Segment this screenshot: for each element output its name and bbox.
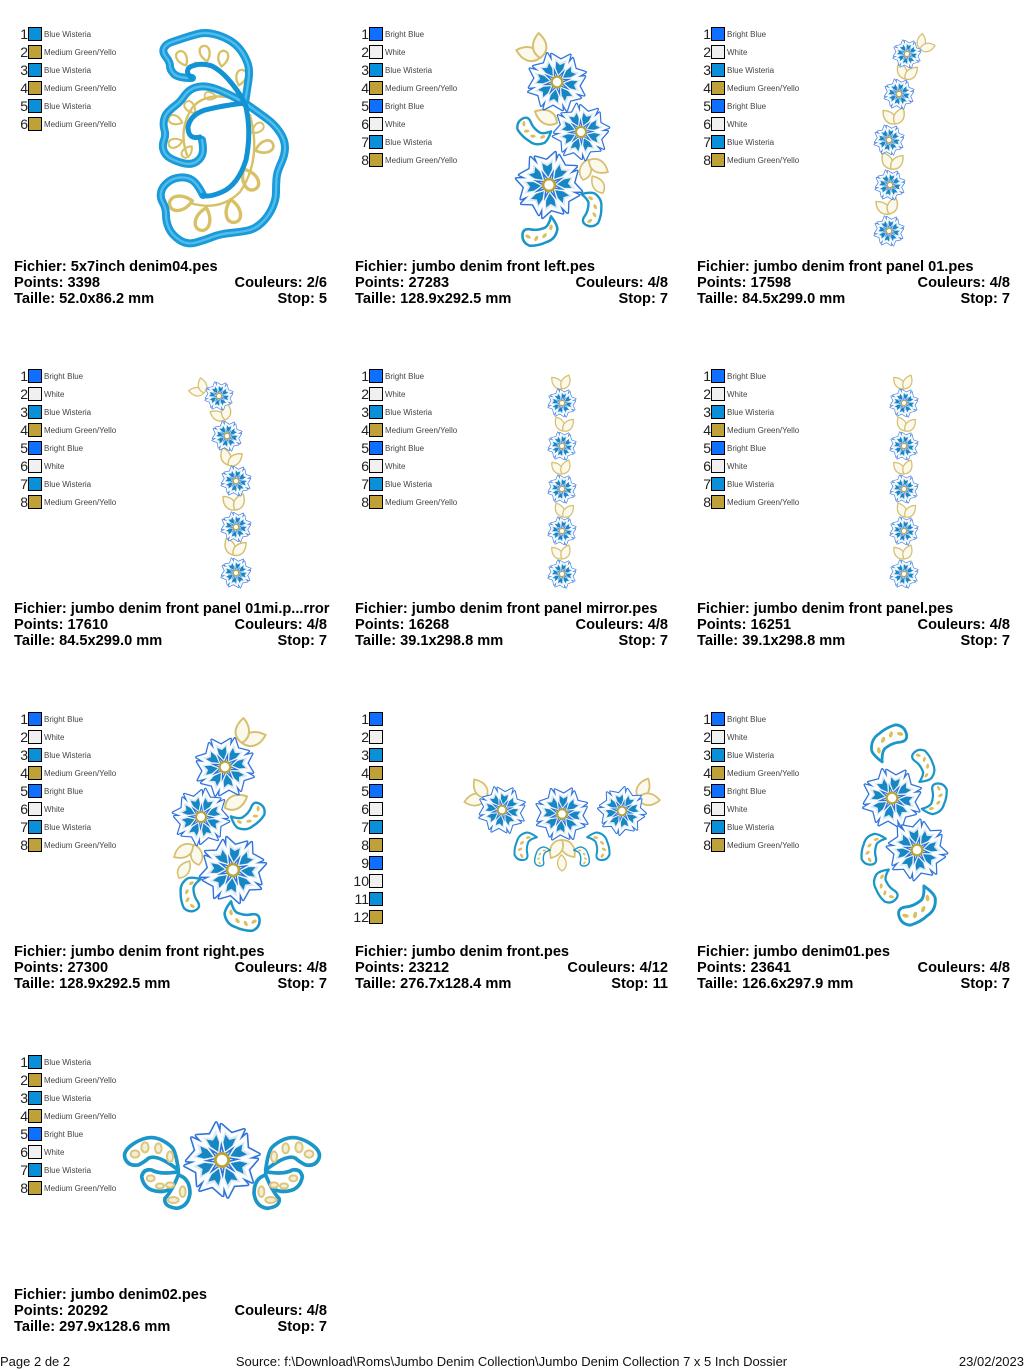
- colour legend: 6: [20, 116, 28, 132]
- colour legend: 8: [20, 1180, 28, 1196]
- file details: [14, 601, 330, 649]
- colour legend: White: [727, 120, 747, 129]
- colour legend: 1: [703, 368, 711, 384]
- colour legend: [703, 711, 799, 853]
- colour legend: Bright Blue: [44, 444, 83, 453]
- colour legend: 3: [703, 62, 711, 78]
- file details: Taille: 39.1x298.8 mm: [697, 633, 845, 649]
- colour legend: 5: [20, 783, 28, 799]
- panel: jumbo denim front panel mirror: [355, 368, 668, 649]
- colour legend: 4: [703, 422, 711, 438]
- colour legend: [361, 368, 457, 510]
- file details: Points: 27300: [14, 960, 108, 976]
- colour legend: 8: [703, 494, 711, 510]
- colour legend: 8: [361, 494, 369, 510]
- colour legend: 5: [20, 98, 28, 114]
- colour legend: 5: [703, 98, 711, 114]
- file details: Couleurs: 4/8: [918, 617, 1010, 633]
- file details: Taille: 276.7x128.4 mm: [355, 976, 511, 992]
- file details: Couleurs: 4/12: [567, 960, 668, 976]
- colour legend: 2: [703, 44, 711, 60]
- colour legend: Bright Blue: [727, 30, 766, 39]
- colour legend: 5: [20, 1126, 28, 1142]
- file details: Points: 23641: [697, 960, 791, 976]
- footer: date: 23/02/2023: [959, 1354, 1024, 1369]
- colour legend: 4: [361, 80, 369, 96]
- colour legend: 6: [20, 1144, 28, 1160]
- colour legend: Blue Wisteria: [727, 66, 774, 75]
- colour legend: Bright Blue: [727, 102, 766, 111]
- colour legend: 8: [20, 837, 28, 853]
- colour legend: Blue Wisteria: [385, 138, 432, 147]
- file details: Fichier: jumbo denim front panel 01.pes: [697, 259, 974, 275]
- colour legend: 7: [703, 134, 711, 150]
- file details: Points: 17598: [697, 275, 791, 291]
- file details: Couleurs: 4/8: [918, 275, 1010, 291]
- file details: Points: 3398: [14, 275, 100, 291]
- colour legend: 1: [361, 26, 369, 42]
- file details: Fichier: jumbo denim front right.pes: [14, 944, 265, 960]
- colour legend: White: [727, 48, 747, 57]
- colour legend: 2: [703, 386, 711, 402]
- colour legend numbers only: [353, 711, 383, 925]
- embroidery: straight floral column: [548, 374, 576, 588]
- file details: Stop: 7: [278, 976, 327, 992]
- colour legend: Blue Wisteria: [44, 30, 91, 39]
- colour legend: 5: [703, 783, 711, 799]
- colour legend: White: [727, 805, 747, 814]
- embroidery: curved floral column mirrored: [188, 377, 252, 588]
- colour legend: 3: [20, 62, 28, 78]
- file details: [14, 259, 327, 307]
- file details: Fichier: jumbo denim front panel.pes: [697, 601, 953, 617]
- panel: jumbo denim front panel: [697, 368, 1010, 649]
- colour legend: [703, 368, 799, 510]
- file details: Points: 20292: [14, 1303, 108, 1319]
- file details: Fichier: jumbo denim front left.pes: [355, 259, 595, 275]
- colour legend: 8: [361, 152, 369, 168]
- colour legend numbers only: 7: [361, 819, 369, 835]
- colour legend: 5: [361, 98, 369, 114]
- colour legend: Bright Blue: [727, 444, 766, 453]
- colour legend: [361, 26, 457, 168]
- colour legend: 8: [20, 494, 28, 510]
- colour legend numbers only: 6: [361, 801, 369, 817]
- colour legend numbers only: 9: [361, 855, 369, 871]
- file details: Stop: 11: [611, 976, 668, 992]
- colour legend: 7: [703, 819, 711, 835]
- colour legend: Blue Wisteria: [385, 408, 432, 417]
- colour legend: Blue Wisteria: [44, 751, 91, 760]
- file details: [697, 944, 1010, 992]
- colour legend numbers only: 8: [361, 837, 369, 853]
- file details: Stop: 7: [619, 291, 668, 307]
- file details: [697, 601, 1010, 649]
- colour legend: Blue Wisteria: [385, 66, 432, 75]
- file details: Fichier: jumbo denim front.pes: [355, 944, 569, 960]
- colour legend: 7: [361, 134, 369, 150]
- colour legend: 1: [703, 26, 711, 42]
- colour legend: Blue Wisteria: [44, 480, 91, 489]
- embroidery: flower with paisley fans: [122, 1121, 322, 1210]
- file details: Couleurs: 4/8: [235, 617, 327, 633]
- colour legend: Bright Blue: [44, 1130, 83, 1139]
- colour legend numbers only: 3: [361, 747, 369, 763]
- file details: Fichier: 5x7inch denim04.pes: [14, 259, 218, 275]
- embroidery: floral spray left: [514, 32, 610, 248]
- colour legend: 4: [361, 422, 369, 438]
- colour legend: Blue Wisteria: [44, 408, 91, 417]
- colour legend: 3: [703, 747, 711, 763]
- colour legend: Bright Blue: [727, 715, 766, 724]
- colour legend: Blue Wisteria: [727, 480, 774, 489]
- colour legend: [20, 368, 116, 510]
- file details: Fichier: jumbo denim01.pes: [697, 944, 890, 960]
- panel: jumbo denim front right: [14, 711, 327, 992]
- colour legend: White: [727, 462, 747, 471]
- file details: Fichier: jumbo denim02.pes: [14, 1287, 207, 1303]
- colour legend: 2: [20, 1072, 28, 1088]
- colour legend numbers only: 5: [361, 783, 369, 799]
- panel: jumbo denim front left: [355, 26, 668, 307]
- colour legend: 3: [361, 404, 369, 420]
- colour legend: 7: [703, 476, 711, 492]
- colour legend: 3: [361, 62, 369, 78]
- panel: jumbo denim front panel 01 mirror: [14, 368, 330, 649]
- colour legend: Bright Blue: [727, 372, 766, 381]
- file details: Stop: 7: [619, 633, 668, 649]
- colour legend: 1: [20, 711, 28, 727]
- footer: source path: Source: f:\Download\Roms\Jumbo Denim Collection\Jumbo Denim Collection 7 x 5 Inch Dossier: [236, 1354, 787, 1369]
- colour legend: 7: [20, 1162, 28, 1178]
- colour legend: White: [44, 805, 64, 814]
- colour legend numbers only: 4: [361, 765, 369, 781]
- colour legend: 6: [703, 801, 711, 817]
- colour legend: 3: [703, 404, 711, 420]
- colour legend: 1: [703, 711, 711, 727]
- colour legend: Bright Blue: [44, 787, 83, 796]
- colour legend: White: [385, 120, 405, 129]
- panel: jumbo denim front panel 01: [697, 26, 1010, 307]
- file details: Points: 16251: [697, 617, 791, 633]
- file details: [14, 1287, 327, 1335]
- colour legend: Blue Wisteria: [727, 408, 774, 417]
- colour legend: White: [44, 462, 64, 471]
- file details: Points: 16268: [355, 617, 449, 633]
- file details: Taille: 126.6x297.9 mm: [697, 976, 853, 992]
- file details: Taille: 84.5x299.0 mm: [697, 291, 845, 307]
- colour legend: 2: [20, 386, 28, 402]
- file details: [355, 259, 668, 307]
- colour legend: Blue Wisteria: [44, 1166, 91, 1175]
- colour legend: Blue Wisteria: [44, 823, 91, 832]
- colour legend numbers only: 1: [361, 711, 369, 727]
- file details: Taille: 39.1x298.8 mm: [355, 633, 503, 649]
- colour legend: 7: [20, 819, 28, 835]
- colour legend: 2: [361, 44, 369, 60]
- colour legend: Blue Wisteria: [727, 823, 774, 832]
- file details: [355, 944, 668, 992]
- colour legend: Bright Blue: [385, 372, 424, 381]
- colour legend: Bright Blue: [727, 787, 766, 796]
- colour legend: White: [44, 733, 64, 742]
- colour legend: [20, 711, 116, 853]
- colour legend: 5: [20, 440, 28, 456]
- colour legend: 6: [703, 116, 711, 132]
- colour legend: Blue Wisteria: [727, 751, 774, 760]
- colour legend: 2: [361, 386, 369, 402]
- file details: Taille: 84.5x299.0 mm: [14, 633, 162, 649]
- colour legend: Blue Wisteria: [44, 102, 91, 111]
- colour legend: Blue Wisteria: [44, 1058, 91, 1067]
- file details: Points: 23212: [355, 960, 449, 976]
- file details: Couleurs: 4/8: [918, 960, 1010, 976]
- colour legend: 7: [361, 476, 369, 492]
- footer: page number: Page 2 de 2: [0, 1354, 70, 1369]
- panel: 5x7inch denim04: [14, 26, 327, 307]
- colour legend: Bright Blue: [44, 715, 83, 724]
- colour legend: Blue Wisteria: [44, 66, 91, 75]
- file details: Couleurs: 4/8: [235, 1303, 327, 1319]
- colour legend: Bright Blue: [385, 444, 424, 453]
- embroidery: curved floral column: [874, 33, 936, 246]
- colour legend: 1: [20, 26, 28, 42]
- colour legend: White: [727, 390, 747, 399]
- file details: Points: 17610: [14, 617, 108, 633]
- colour legend: White: [385, 48, 405, 57]
- colour legend: 8: [703, 837, 711, 853]
- colour legend: 3: [20, 747, 28, 763]
- file details: [697, 259, 1010, 307]
- file details: Stop: 7: [961, 976, 1010, 992]
- colour legend: White: [385, 462, 405, 471]
- file details: Fichier: jumbo denim front panel mirror.pes: [355, 601, 657, 617]
- colour legend: White: [44, 1148, 64, 1157]
- colour legend: 5: [361, 440, 369, 456]
- file details: Stop: 5: [278, 291, 327, 307]
- file details: [14, 944, 327, 992]
- file details: Taille: 297.9x128.6 mm: [14, 1319, 170, 1335]
- colour legend: 4: [20, 1108, 28, 1124]
- colour legend: 4: [20, 422, 28, 438]
- colour legend: 5: [703, 440, 711, 456]
- file details: Taille: 128.9x292.5 mm: [14, 976, 170, 992]
- colour legend: 2: [703, 729, 711, 745]
- file details: Stop: 7: [278, 633, 327, 649]
- file details: Couleurs: 4/8: [235, 960, 327, 976]
- colour legend: Bright Blue: [385, 102, 424, 111]
- colour legend: 4: [703, 765, 711, 781]
- embroidery: paisley: [156, 29, 289, 248]
- colour legend: 7: [20, 476, 28, 492]
- colour legend: Blue Wisteria: [44, 1094, 91, 1103]
- colour legend: [703, 26, 799, 168]
- colour legend: 4: [20, 80, 28, 96]
- colour legend: White: [385, 390, 405, 399]
- colour legend: White: [727, 733, 747, 742]
- file details: Points: 27283: [355, 275, 449, 291]
- colour legend: 2: [20, 44, 28, 60]
- colour legend: 2: [20, 729, 28, 745]
- colour legend: 6: [361, 458, 369, 474]
- colour legend: 3: [20, 1090, 28, 1106]
- file details: Couleurs: 4/8: [576, 275, 668, 291]
- colour legend: 6: [361, 116, 369, 132]
- colour legend: 6: [20, 801, 28, 817]
- colour legend: 6: [703, 458, 711, 474]
- panel: jumbo denim02: [14, 1054, 327, 1335]
- panel: jumbo denim front: [353, 711, 668, 992]
- file details: Stop: 7: [278, 1319, 327, 1335]
- colour legend: Bright Blue: [44, 372, 83, 381]
- colour legend: 6: [20, 458, 28, 474]
- colour legend: 3: [20, 404, 28, 420]
- colour legend: 1: [20, 368, 28, 384]
- file details: Stop: 7: [961, 291, 1010, 307]
- colour legend numbers only: 2: [361, 729, 369, 745]
- colour legend: [20, 1054, 116, 1196]
- colour legend: 1: [361, 368, 369, 384]
- colour legend: 1: [20, 1054, 28, 1070]
- colour legend: Blue Wisteria: [727, 138, 774, 147]
- colour legend: 4: [20, 765, 28, 781]
- file details: [355, 601, 668, 649]
- colour legend numbers only: 10: [353, 873, 369, 889]
- file details: Stop: 7: [961, 633, 1010, 649]
- embroidery: neckline floral arrangement: [464, 778, 661, 872]
- colour legend numbers only: 12: [353, 909, 369, 925]
- panel: jumbo denim01: [697, 711, 1010, 992]
- colour legend numbers only: 11: [354, 891, 369, 907]
- colour legend: 4: [703, 80, 711, 96]
- colour legend: [20, 26, 116, 132]
- embroidery: two flowers with curls: [860, 723, 948, 927]
- embroidery: floral spray right: [172, 717, 268, 932]
- colour legend: Bright Blue: [385, 30, 424, 39]
- file details: Couleurs: 2/6: [235, 275, 327, 291]
- colour legend: White: [44, 390, 64, 399]
- file details: Taille: 128.9x292.5 mm: [355, 291, 511, 307]
- file details: Taille: 52.0x86.2 mm: [14, 291, 154, 307]
- colour legend: 8: [703, 152, 711, 168]
- colour legend: Blue Wisteria: [385, 480, 432, 489]
- embroidery: straight floral column: [890, 374, 918, 588]
- file details: Couleurs: 4/8: [576, 617, 668, 633]
- file details: Fichier: jumbo denim front panel 01mi.p...rror: [14, 601, 329, 617]
